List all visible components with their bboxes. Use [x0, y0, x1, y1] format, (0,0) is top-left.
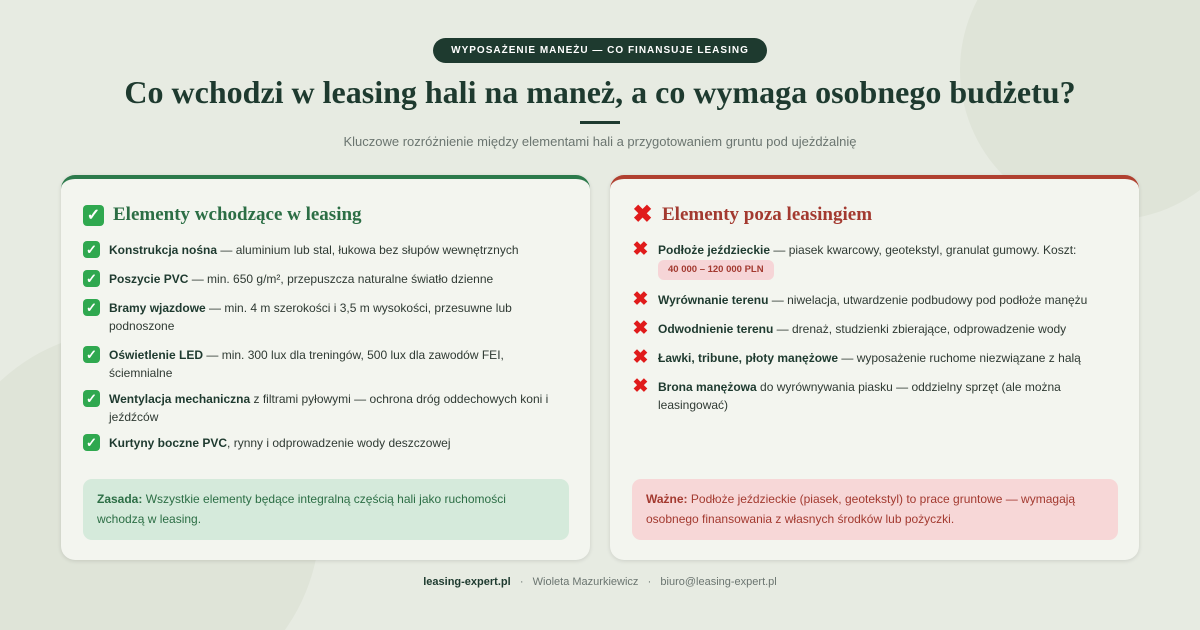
- list: included items: Bramy wjazdowe — min. 4 m szerokości i 3,5 m wysokości, przesuwne lub podnoszone: [109, 301, 512, 333]
- list: included items: ✓: [86, 300, 97, 315]
- title: Co wchodzi w leasing hali na maneż, a co wymaga osobnego budżetu?: [124, 74, 1076, 110]
- badge pill: WYPOSAŻENIE MANEŻU — CO FINANSUJE LEASING: [451, 45, 749, 56]
- list: included items: ✓: [86, 271, 97, 286]
- list: included items: Kurtyny boczne PVC, rynny i odprowadzenie wody deszczowej: [109, 436, 450, 450]
- note: important: [632, 479, 1118, 540]
- heading: outside: ✖: [632, 202, 653, 228]
- list: excluded items: Podłoże jeździeckie — piasek kwarcowy, geotekstyl, granulat gumowy. Koszt:: [658, 243, 1076, 257]
- list: included items: Poszycie PVC — min. 650 g/m², przepuszcza naturalne światło dzienne: [109, 272, 493, 286]
- note: rule: [83, 479, 569, 540]
- list: included items: Wentylacja mechaniczna z filtrami pyłowymi — ochrona dróg oddechowych koni i jeźdźców: [109, 392, 548, 424]
- panel: included in leasing: [61, 175, 590, 560]
- list: included items: [83, 241, 548, 451]
- list: excluded items: [633, 239, 1087, 412]
- list: included items: ✓: [86, 391, 97, 406]
- list: included items: ✓: [86, 347, 97, 362]
- list: excluded items: ✖: [633, 376, 648, 397]
- list: included items: Konstrukcja nośna — aluminium lub stal, łukowa bez słupów wewnętrznych: [109, 243, 518, 257]
- list: included items: ✓: [86, 435, 97, 450]
- note: important: Ważne: Podłoże jeździeckie (piasek, geotekstyl) to prace gruntowe — wymagają osobnego finansowania z własnych środków lub pożyczki.: [646, 492, 1075, 526]
- panel: outside leasing: [610, 175, 1139, 560]
- list: excluded items: 40 000 – 120 000 PLN: [668, 264, 764, 275]
- list: excluded items: Brona manężowa do wyrównywania piasku — oddzielny sprzęt (ale można leasingować): [658, 380, 1061, 412]
- list: excluded items: Odwodnienie terenu — drenaż, studzienki zbierające, odprowadzenie wody: [658, 322, 1066, 336]
- footer: leasing-expert.pl · Wioleta Mazurkiewicz · biuro@leasing-expert.pl: [423, 576, 777, 588]
- badge pill: [433, 38, 767, 63]
- heading: outside: Elementy poza leasingiem: [662, 204, 872, 225]
- list: included items: ściemnialne: [109, 366, 172, 380]
- list: excluded items: ✖: [633, 289, 648, 310]
- heading: included: Elementy wchodzące w leasing: [113, 204, 362, 225]
- heading: included: ✓: [87, 206, 100, 224]
- list: excluded items: Ławki, tribune, płoty manężowe — wyposażenie ruchome niezwiązane z halą: [658, 351, 1081, 365]
- note: rule: Zasada: Wszystkie elementy będące integralną częścią hali jako ruchomości wchodzą w leasing.: [97, 492, 506, 526]
- list: excluded items: ✖: [633, 239, 648, 260]
- list: included items: Oświetlenie LED — min. 300 lux dla treningów, 500 lux dla zawodów FEI,: [109, 348, 504, 362]
- list: included items: ✓: [86, 242, 97, 257]
- list: excluded items: ✖: [633, 347, 648, 368]
- list: excluded items: Wyrównanie terenu — niwelacja, utwardzenie podbudowy pod podłoże manężu: [658, 293, 1087, 307]
- list: excluded items: ✖: [633, 318, 648, 339]
- subtitle: Kluczowe rozróżnienie między elementami hali a przygotowaniem gruntu pod ujeżdżalnię: [343, 134, 857, 149]
